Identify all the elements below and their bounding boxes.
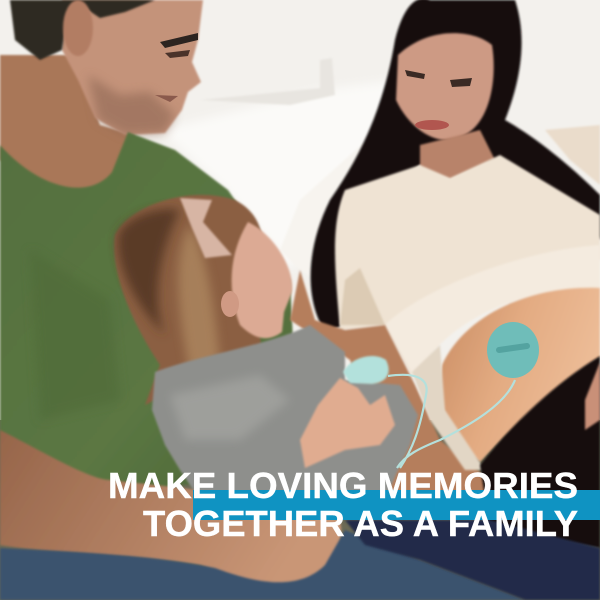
woman: lower lace trim [412,345,485,470]
woman: black pants [480,356,600,548]
man: ear [63,0,93,56]
woman: lips [415,120,449,130]
man: neck and chest skin [0,55,135,205]
headline line 2: TOGETHER AS A FAMILY [143,503,578,544]
man: forearm [0,430,341,589]
girl: hair bow [180,198,232,258]
device: cable [388,375,515,468]
woman: pregnant belly [440,288,600,462]
device: girl's hands [300,378,395,468]
girl: ear [221,291,239,317]
girl: hair dark area [118,209,180,335]
headline [108,465,578,544]
woman: forearm [290,270,490,492]
girl: face [232,222,292,338]
device: round sensor on belly [487,322,539,378]
girl: brown hair [114,195,320,405]
girl: hair highlights [178,225,220,375]
woman: face [396,33,494,140]
girl: sweater highlights [170,375,290,440]
woman [290,0,600,600]
man: mouth [155,95,178,102]
man: face [62,0,203,135]
woman: dark jeans [345,520,600,600]
woman: long black hair [311,0,600,332]
pillow behind woman [280,120,390,300]
woman: lace blouse [335,155,600,375]
man: beard shadow [88,75,175,135]
man: shirt fold shadow [30,250,120,420]
man: eyebrow [160,33,198,48]
girl: gray sweater [152,325,418,500]
man: hair [10,0,155,60]
man: eye [165,50,190,58]
dark base under lower scene [0,420,600,600]
woman: blouse hem fold [385,245,600,378]
headline line 1: MAKE LOVING MEMORIES [108,465,578,506]
device: handheld speaker [343,356,389,384]
monitor device and cable [300,322,539,468]
woman: blouse sleeve lace left [340,268,385,325]
woman: neck and chest [420,130,495,180]
blue banner stripe [193,490,600,520]
man: jeans [0,530,525,600]
woman: hand on hip [585,362,600,430]
woman: blouse shoulder lace [545,125,600,185]
girl [114,195,418,500]
woman: eyes [405,70,472,87]
device: sensor logo [499,346,527,350]
man: green t-shirt [0,132,300,495]
